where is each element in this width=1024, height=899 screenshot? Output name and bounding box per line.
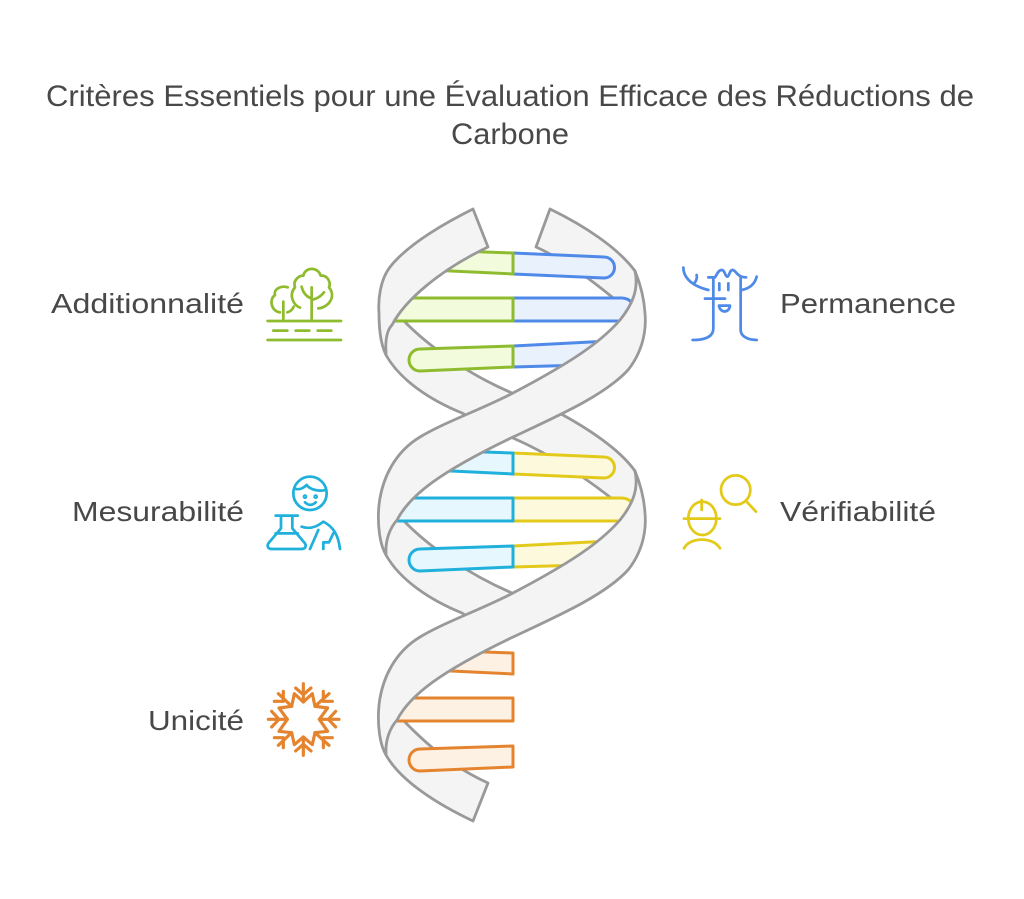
back strand: top right <box>536 209 640 315</box>
rungs: Unicité <box>385 650 513 771</box>
front strand: top left <box>379 209 488 355</box>
icon: snowflake <box>268 684 339 755</box>
front strand: upper crossing <box>378 271 645 555</box>
DNA helix diagram <box>378 209 645 821</box>
icon: smiling tree <box>683 268 757 340</box>
back strand: lower crossing <box>385 512 530 625</box>
title: Carbone <box>451 118 569 151</box>
rungs: Additionnalité and Permanence <box>385 250 633 371</box>
label: Additionnalité: Additionnalité <box>51 288 244 319</box>
back strand: upper crossing <box>385 312 640 515</box>
rungs: Mesurabilité and Vérifiabilité <box>385 450 633 571</box>
title <box>46 80 974 151</box>
label: Permanence: Permanence <box>780 288 956 319</box>
back strand: bottom end <box>385 712 488 821</box>
label: Unicité: Unicité <box>148 705 244 736</box>
label: Vérifiabilité: Vérifiabilité <box>780 496 936 527</box>
label: Mesurabilité: Mesurabilité <box>72 496 244 527</box>
front strand: lower crossing <box>378 471 645 755</box>
icon: trees on ground <box>268 269 341 340</box>
icon: inspector with magnifier <box>684 475 756 548</box>
title: Critères Essentiels pour une Évaluation Efficace des Réductions de <box>46 80 974 113</box>
icon: scientist with flask <box>268 477 340 549</box>
